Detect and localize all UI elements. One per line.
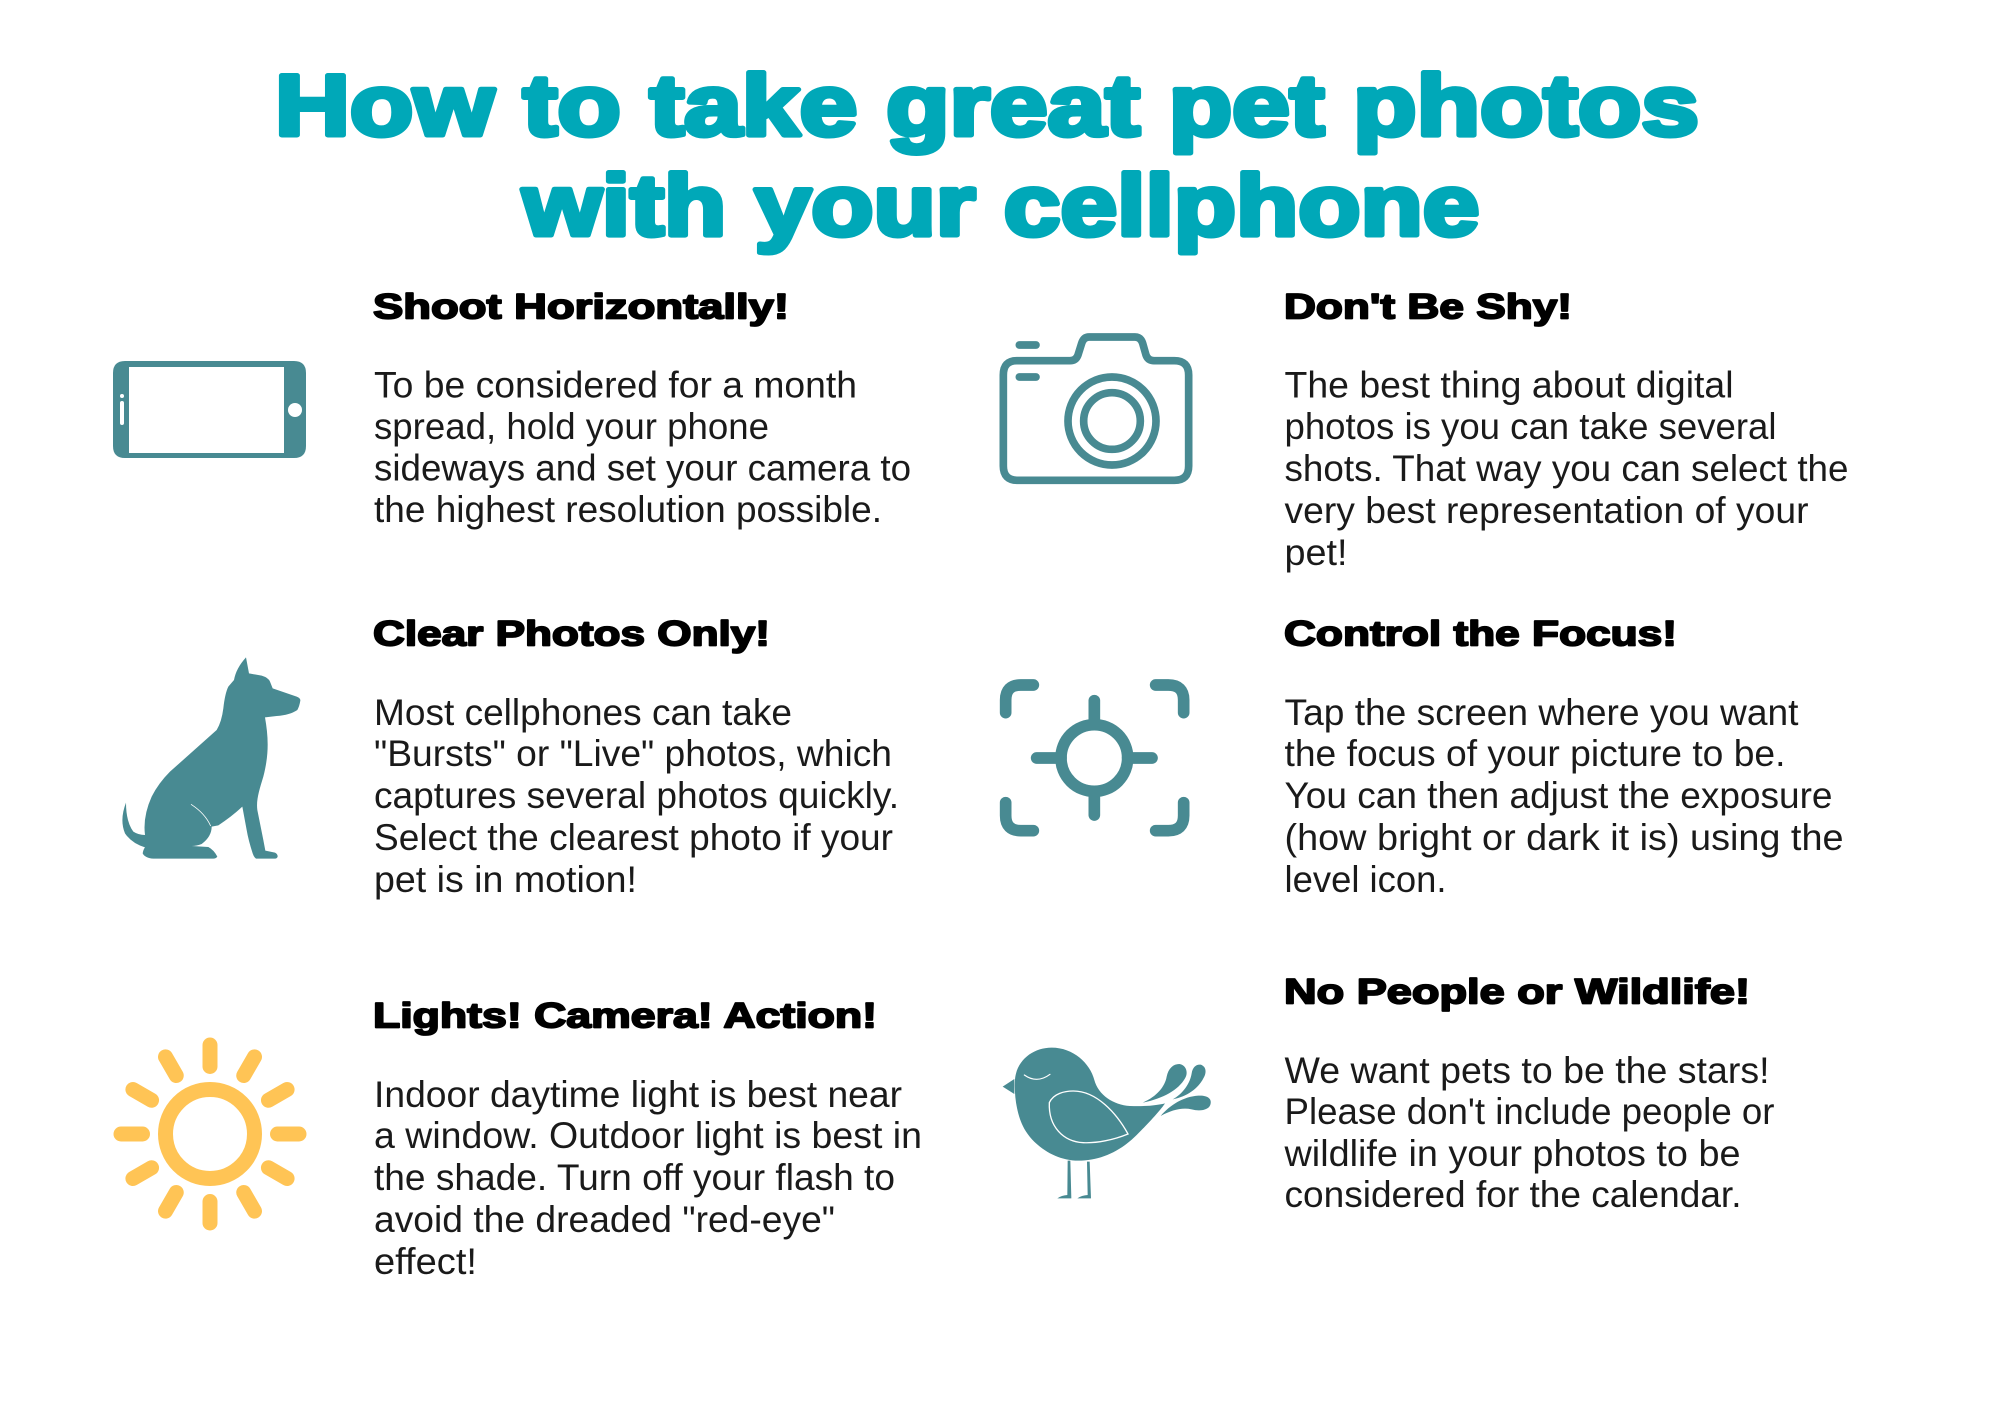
- body text: Tap the screen where you want: [1284, 692, 1799, 733]
- body text: Please don't include people or: [1284, 1091, 1774, 1132]
- body text: shots. That way you can select the: [1284, 448, 1848, 489]
- body text: pet is in motion!: [374, 859, 637, 900]
- body text: the focus of your picture to be.: [1284, 733, 1786, 774]
- body text: avoid the dreaded "red-eye": [374, 1199, 835, 1240]
- icon: sun: [121, 1045, 299, 1223]
- body text: level icon.: [1284, 859, 1446, 900]
- heading: Don't Be Shy!: [1284, 288, 1572, 326]
- title: How to take great pet photos: [275, 58, 1699, 154]
- body text: "Bursts" or "Live" photos, which: [374, 733, 892, 774]
- body text: very best representation of your: [1284, 490, 1808, 531]
- title: [275, 58, 1699, 254]
- body text: [1284, 364, 1848, 573]
- panel: shoot horizontally: [113, 288, 911, 530]
- panel: don't be shy: [1003, 288, 1848, 573]
- panel: lights camera action: [121, 996, 922, 1282]
- body text: You can then adjust the exposure: [1284, 775, 1832, 816]
- body text: a window. Outdoor light is best in: [374, 1115, 922, 1156]
- body text: sideways and set your camera to: [374, 448, 911, 488]
- icon: sitting dog: [122, 657, 300, 859]
- body text: [374, 692, 899, 900]
- heading: Shoot Horizontally!: [373, 288, 789, 326]
- heading: No People or Wildlife!: [1284, 972, 1750, 1012]
- panel: no people or wildlife: [1003, 972, 1774, 1215]
- body text: The best thing about digital: [1284, 364, 1734, 406]
- body text: Indoor daytime light is best near: [374, 1074, 902, 1115]
- title: with your cellphone: [521, 158, 1480, 254]
- body text: spread, hold your phone: [374, 406, 769, 447]
- body text: the shade. Turn off your flash to: [374, 1157, 895, 1198]
- icon: phone held sideways: [113, 361, 306, 458]
- body text: [374, 1074, 922, 1282]
- icon: bird: [1003, 1048, 1211, 1198]
- body text: We want pets to be the stars!: [1284, 1050, 1770, 1091]
- body text: [374, 364, 911, 530]
- body text: captures several photos quickly.: [374, 775, 899, 816]
- body text: [1283, 1050, 1774, 1215]
- body text: (how bright or dark it is) using the: [1284, 817, 1844, 858]
- icon: focus reticle: [1006, 685, 1184, 831]
- heading: Clear Photos Only!: [373, 614, 770, 654]
- body text: Most cellphones can take: [374, 692, 792, 733]
- body text: To be considered for a month: [374, 364, 857, 406]
- body text: wildlife in your photos to be: [1283, 1133, 1740, 1174]
- body text: effect!: [374, 1241, 477, 1282]
- body text: the highest resolution possible.: [374, 489, 882, 530]
- panel: clear photos only: [122, 614, 899, 900]
- body text: considered for the calendar.: [1284, 1174, 1742, 1215]
- heading: Control the Focus!: [1284, 614, 1677, 654]
- body text: photos is you can take several: [1284, 406, 1776, 447]
- body text: pet!: [1284, 532, 1348, 573]
- icon: camera: [1003, 337, 1189, 480]
- heading: Lights! Camera! Action!: [373, 996, 877, 1036]
- body text: [1284, 692, 1844, 900]
- body text: Select the clearest photo if your: [374, 817, 893, 858]
- panel: control the focus: [1006, 614, 1844, 900]
